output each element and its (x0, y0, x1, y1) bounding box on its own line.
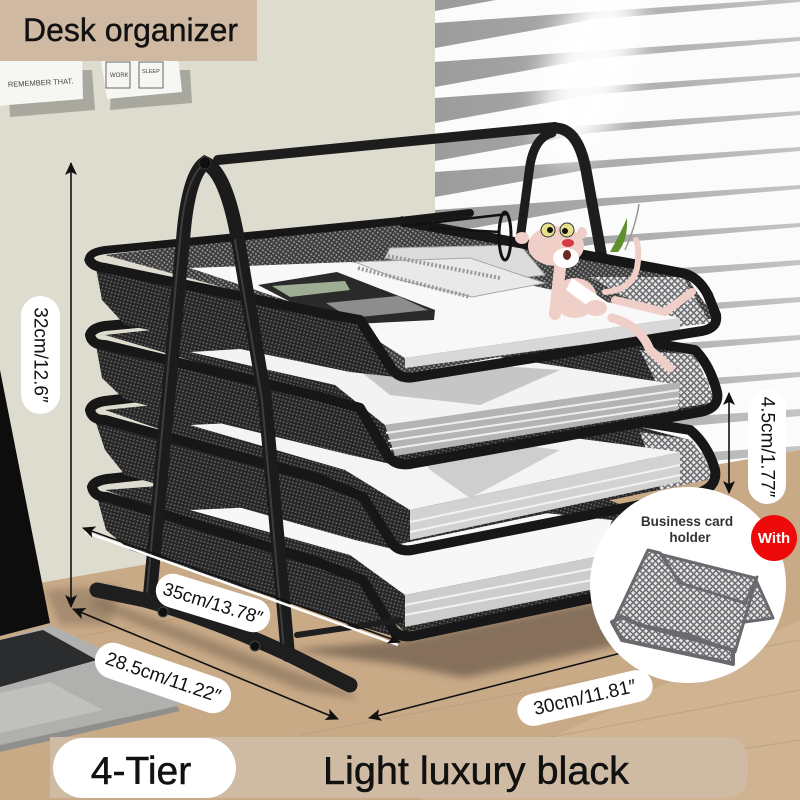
tier pill: 4-Tier (91, 750, 191, 793)
label: front width (514, 667, 656, 729)
label: front width: 30cm/11.81″ (532, 676, 639, 720)
callout: business card holder: Business card (641, 514, 733, 529)
icon: mesh card holder (612, 550, 773, 664)
laptop (0, 370, 180, 752)
tray 1 with calculator and notebooks (89, 213, 716, 378)
badge: With: With (758, 530, 790, 547)
label: diagonal width (152, 569, 274, 637)
height arrow (70, 163, 72, 607)
badge: With (751, 515, 797, 561)
label: tier gap (748, 390, 786, 504)
bottom colour bar: Light luxury black (323, 750, 629, 793)
tray 2 with paper stack (90, 300, 717, 466)
tray 4 with books (92, 460, 716, 640)
front width arrow (369, 652, 625, 718)
wooden desk (0, 450, 800, 800)
organizer front A-frame with base foot (97, 157, 400, 685)
label: height: 32cm/12.6″ (30, 307, 50, 403)
sticky notes on wall: SLEEP (142, 69, 160, 75)
width diagonal arrow (83, 528, 400, 645)
calculator (258, 272, 435, 325)
label: depth: 28.5cm/11.22″ (103, 648, 224, 708)
label: tier gap: 4.5cm/1.77″ (756, 397, 778, 498)
glasses (402, 212, 511, 260)
tray 3 with book (90, 375, 716, 552)
sticky notes on wall: REMEMBER THAT. (8, 77, 74, 89)
pink panther figure (515, 223, 692, 368)
tier gap arrow (728, 393, 730, 493)
window blind light stripes on wall (435, 0, 800, 496)
label: depth (90, 638, 236, 718)
title banner: Desk organizer (23, 12, 238, 48)
callout: business card holder: holder (669, 530, 711, 545)
callout: business card holder (590, 487, 786, 683)
leaf (610, 204, 639, 252)
sticky notes on wall (0, 55, 192, 117)
spiral notebooks (355, 245, 545, 297)
tier pill (53, 738, 236, 798)
title banner (0, 0, 257, 61)
label: height (21, 296, 60, 414)
depth arrow (73, 609, 338, 719)
label: diagonal width: 35cm/13.78″ (161, 578, 266, 628)
sticky notes on wall: WORK (110, 73, 129, 79)
bottom colour bar (50, 737, 748, 798)
shadow on desk beneath organizer (45, 585, 640, 700)
organizer rear frame (218, 127, 602, 258)
light patch on wall (521, 0, 659, 173)
